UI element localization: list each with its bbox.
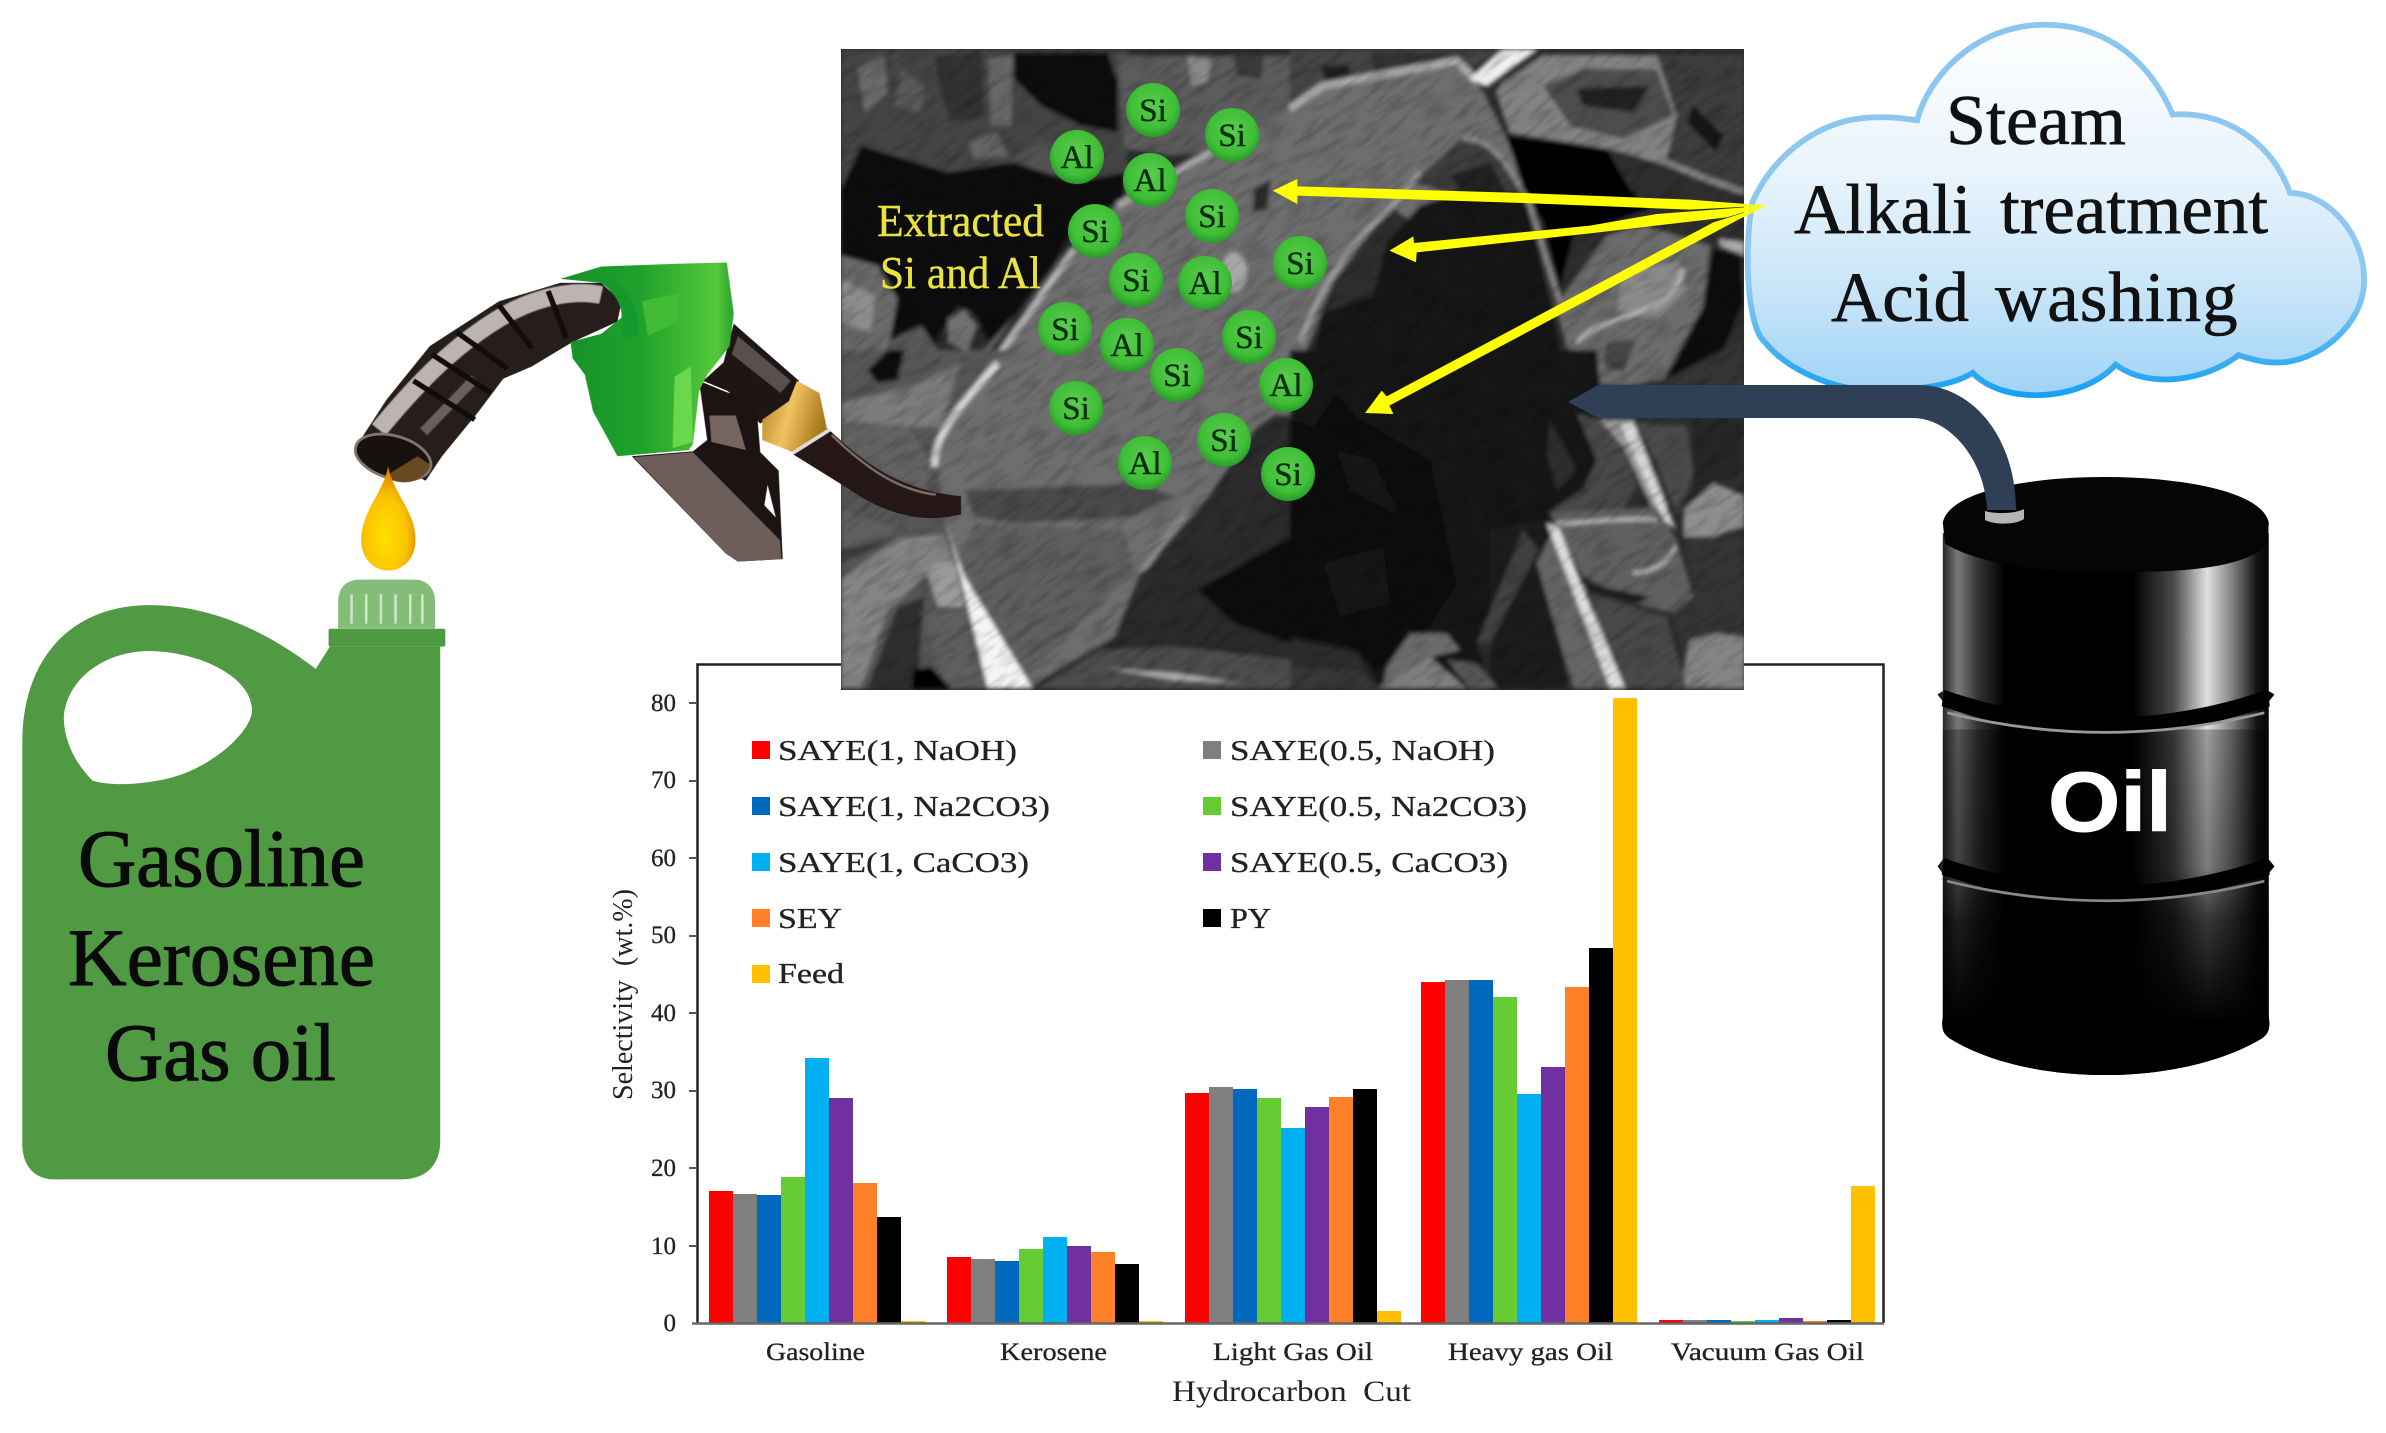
x axis title: Hydrocarbon Cut [1172, 1375, 1412, 1408]
cloud: treatments [1748, 25, 2364, 395]
category labels [766, 1339, 1864, 1366]
cloud text: Steam [1946, 82, 2126, 160]
chart frame [698, 664, 1884, 1323]
fuel nozzle [350, 262, 961, 570]
legend: SEY [778, 903, 842, 935]
cloud text [1794, 82, 2268, 337]
cloud text: Alkali [1794, 171, 1971, 249]
y axis ticks: 70 [651, 767, 676, 794]
arrow to middle pore [1389, 206, 1767, 262]
y axis ticks: 40 [651, 1000, 676, 1027]
cloud text: Acid [1831, 259, 1969, 337]
legend: Feed [778, 958, 845, 990]
gasoline jug [22, 580, 445, 1179]
y axis title: Selectivity (wt.%) [607, 889, 639, 1100]
extracted Si and Al caption: Si and Al [880, 247, 1041, 298]
extracted atoms: green Si and Al spheres: Si [1163, 358, 1191, 394]
legend: SAYE(0.5, Na2CO3) [1230, 791, 1527, 823]
hose collar [762, 381, 828, 452]
category labels: Kerosene [1000, 1339, 1107, 1366]
barrel ribs [1943, 698, 2269, 726]
yellow arrows from cloud to crystal [1273, 179, 1767, 414]
extracted atoms: green Si and Al spheres: Al [1188, 266, 1222, 302]
extracted atoms: green Si and Al spheres: Si [1122, 263, 1150, 299]
extracted atoms: green Si and Al spheres: Si [1274, 457, 1302, 493]
extracted atoms: green Si and Al spheres: Al [1060, 140, 1094, 176]
y axis ticks [651, 690, 676, 1337]
extracted atoms: green Si and Al spheres: Si [1235, 320, 1263, 356]
legend: PY [1230, 903, 1271, 935]
barrel top [1943, 477, 2269, 573]
extracted atoms: green Si and Al spheres: Al [1110, 328, 1144, 364]
arrow to upper pore [1273, 179, 1767, 210]
extracted Si and Al caption: Extracted [877, 195, 1044, 246]
extracted atoms: green Si and Al spheres: Si [1198, 199, 1226, 235]
cloud text: washing [1995, 259, 2239, 337]
jug text [68, 813, 375, 1098]
barrel label: Oil [2048, 755, 2172, 849]
extracted atoms: green Si and Al spheres: Si [1081, 214, 1109, 250]
sem surface texture [841, 49, 1744, 690]
bar chart: selectivity by hydrocarbon cut [607, 664, 1884, 1408]
oil barrel [1938, 477, 2274, 1075]
y axis ticks: 0 [664, 1310, 676, 1337]
extracted atoms: green Si and Al spheres: Si [1210, 423, 1238, 459]
category labels: Light Gas Oil [1213, 1339, 1373, 1366]
y axis ticks: 80 [651, 690, 676, 717]
extracted atoms: green Si and Al spheres: Al [1134, 163, 1166, 199]
bars: Light Gas Oil [1185, 1087, 1401, 1323]
extracted atoms: green Si and Al spheres: Si [1062, 391, 1090, 427]
category labels: Vacuum Gas Oil [1671, 1339, 1864, 1366]
extracted Si and Al caption [877, 195, 1044, 298]
y axis ticks: 60 [651, 845, 676, 872]
barrel body [1938, 533, 2274, 1075]
category labels: Heavy gas Oil [1448, 1339, 1613, 1366]
oil drop [361, 466, 415, 570]
extracted atoms: green Si and Al spheres: Si [1218, 118, 1246, 154]
SEM micrograph panel [841, 49, 1744, 690]
legend [752, 735, 1527, 990]
cloud shape [1748, 25, 2364, 395]
jug text: Gas oil [105, 1007, 336, 1098]
hose [793, 428, 961, 518]
dark pipe from barrel to crystal [1568, 385, 2024, 524]
y axis ticks: 30 [651, 1077, 676, 1104]
bars: Kerosene [947, 1237, 1163, 1323]
y axis ticks: 50 [651, 922, 676, 949]
spout [356, 283, 622, 481]
green handle [560, 262, 734, 456]
category labels: Gasoline [766, 1339, 865, 1366]
spout opening [350, 426, 436, 488]
legend: SAYE(1, Na2CO3) [778, 791, 1050, 823]
bars: Gasoline [709, 1058, 925, 1323]
x axis line [692, 1322, 1884, 1325]
bars: Heavy gas Oil [1421, 698, 1637, 1323]
extracted atoms: green Si and Al spheres: Al [1128, 446, 1162, 482]
legend: SAYE(0.5, CaCO3) [1230, 847, 1508, 879]
legend: SAYE(0.5, NaOH) [1230, 735, 1495, 767]
cloud text: treatment [2000, 171, 2268, 249]
jug text: Kerosene [68, 912, 375, 1003]
jug text: Gasoline [78, 813, 365, 904]
extracted atoms: green Si and Al spheres: Si [1286, 246, 1314, 282]
extracted atoms: green Si and Al spheres: Si [1051, 312, 1079, 348]
jug body [22, 605, 440, 1179]
jug cap [338, 580, 435, 629]
legend: SAYE(1, CaCO3) [778, 847, 1029, 879]
pipe fitting [1985, 509, 2024, 524]
extracted atoms: green Si and Al spheres [1038, 83, 1327, 501]
jug flange [329, 629, 445, 647]
legend: SAYE(1, NaOH) [778, 735, 1017, 767]
trigger guard [632, 381, 783, 562]
arrow to lower crystal [1365, 206, 1767, 414]
extracted atoms: green Si and Al spheres: Al [1270, 368, 1302, 404]
y axis ticks: 10 [651, 1233, 676, 1260]
y axis ticks: 20 [651, 1155, 676, 1182]
extracted atoms: green Si and Al spheres: Si [1139, 93, 1167, 129]
bars: Vacuum Gas Oil [1659, 1186, 1875, 1323]
